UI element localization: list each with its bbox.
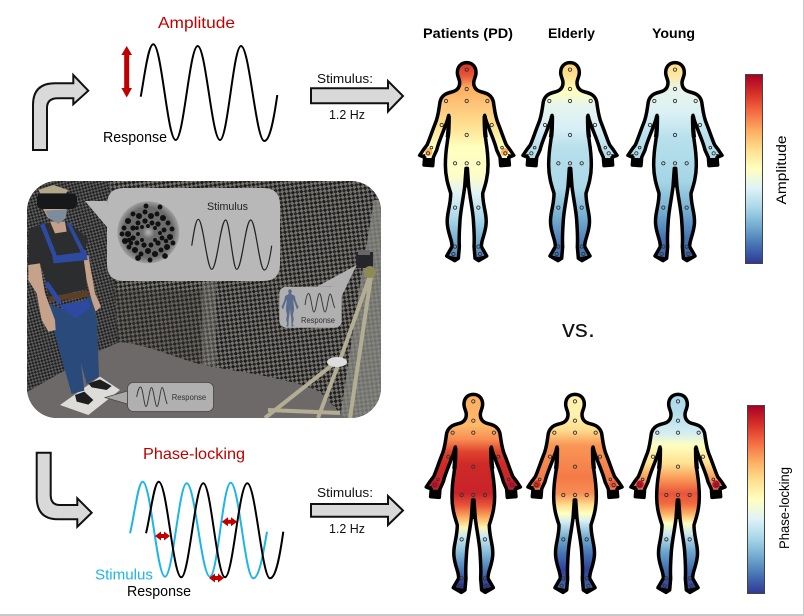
label: Stimulus 1.2 Hz top: 1.2 Hz — [329, 107, 365, 122]
icon: optic flow disc — [117, 201, 179, 263]
label: Stimulus 1.2 Hz bottom: Stimulus: — [317, 485, 373, 500]
callout: stimulus bubble — [85, 188, 280, 281]
callout: camera response bubble — [279, 265, 357, 328]
arrow: bent up arrow — [33, 75, 88, 150]
text: vs.: vs. — [562, 316, 595, 343]
label: Stimulus 1.2 Hz top: Stimulus: — [317, 71, 373, 86]
label: Response black: Response — [127, 583, 191, 600]
label: Response: Response — [103, 129, 167, 146]
body map: young amplitude — [626, 63, 724, 262]
label: Stimulus blue: Stimulus — [95, 566, 153, 584]
label: Response board: Response — [172, 393, 207, 402]
label: Stimulus 1.2 Hz bottom: 1.2 Hz — [329, 521, 365, 536]
label: Response small: Response — [301, 316, 336, 325]
title: Phase-locking: Phase-locking — [143, 446, 245, 463]
arrow: stimulus right arrow top — [311, 81, 403, 112]
body map: patients phase-locking — [424, 394, 523, 594]
body map: elderly phase-locking — [526, 394, 624, 594]
body map: patients amplitude — [417, 63, 516, 262]
label: Amplitude axis: Amplitude — [773, 135, 789, 204]
heading: Patients (PD): Patients (PD) — [423, 25, 513, 41]
chart: camera response wave — [305, 294, 335, 312]
label: Stimulus 1.2 Hz bottom — [317, 485, 373, 536]
label: Stimulus: Stimulus — [207, 201, 248, 213]
arrow: amplitude double arrow — [121, 46, 132, 98]
heading: Young: Young — [652, 25, 695, 41]
callout: balance board response bubble — [105, 382, 214, 412]
body map: elderly amplitude — [521, 63, 619, 262]
colorbar: amplitude — [746, 74, 762, 264]
colorbar: phase-locking — [748, 406, 764, 594]
panel: experiment photo — [27, 181, 381, 418]
chart: stimulus wave — [192, 219, 272, 270]
label: Stimulus 1.2 Hz top — [317, 71, 373, 122]
label: Phase-locking axis: Phase-locking — [776, 467, 792, 549]
chart: response sine wave — [141, 44, 277, 141]
chart: stimulus and response sine waves — [130, 482, 283, 578]
arrows: phase lag markers — [155, 517, 237, 582]
chart: board response wave — [137, 387, 167, 406]
body map: young phase-locking — [629, 394, 727, 594]
title: Amplitude: Amplitude — [158, 15, 235, 32]
icon: small body figure — [281, 289, 299, 327]
arrow: stimulus right arrow bottom — [311, 496, 403, 525]
person on balance board — [28, 185, 120, 415]
heading: Elderly: Elderly — [548, 25, 595, 41]
arrow: bent down arrow — [37, 453, 92, 527]
